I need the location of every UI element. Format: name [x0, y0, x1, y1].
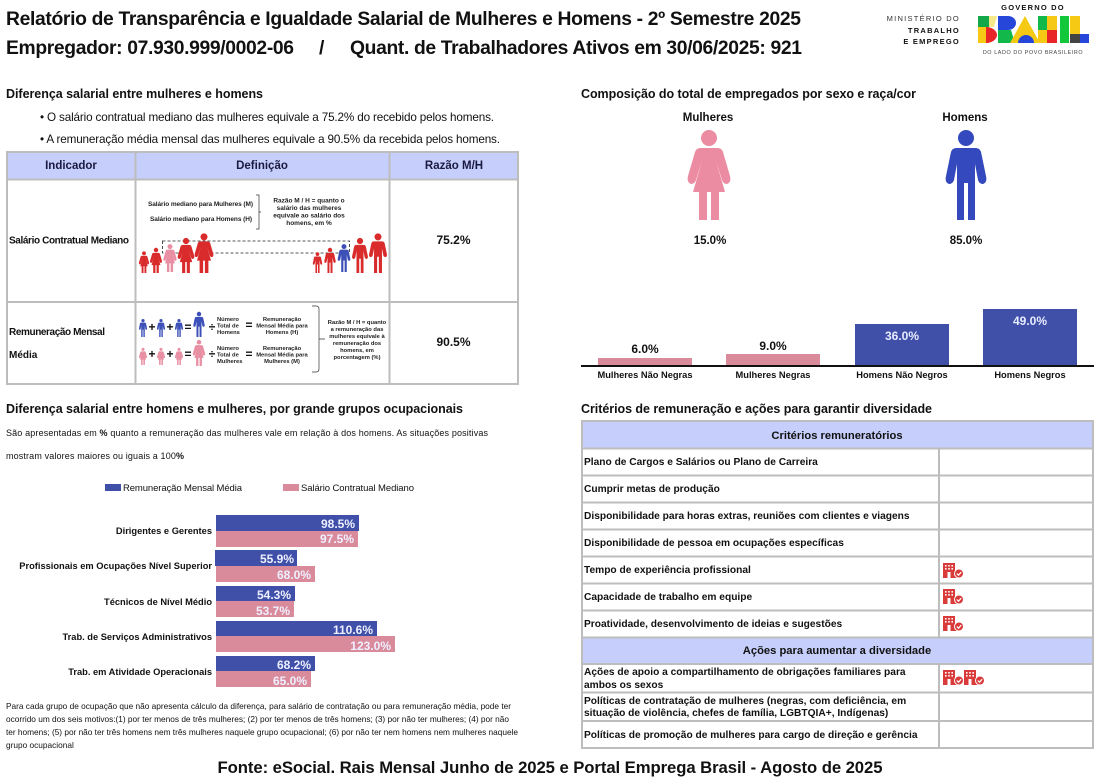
critérios labels: Proatividade, desenvolvimento de ideias e sugestões	[584, 619, 843, 630]
diagram: remuneração média: Razão M / H = quanto	[328, 320, 387, 326]
text block: explicação: São apresentadas em % quanto a remuneração das mulheres vale em relação à dos homens. As situações positivas	[6, 428, 488, 438]
table headers: Razão M/H	[425, 160, 483, 172]
table headers: Definição	[236, 160, 288, 172]
text block: nota de rodapé: grupo ocupacional	[6, 740, 74, 750]
bar chart: composição por sexo e raça	[581, 309, 1094, 380]
critérios labels: Políticas de promoção de mulheres para cargo de direção e gerência	[584, 730, 918, 741]
bar chart: grupos ocupacionais: 68.0%	[277, 568, 311, 582]
bar chart: grupos ocupacionais: Dirigentes e Gerentes	[116, 526, 212, 536]
heading: diferença salarial: Diferença salarial entre mulheres e homens	[6, 87, 263, 101]
row labels: Salário Contratual Mediano	[9, 236, 129, 246]
diagram: remuneração média: =	[184, 347, 192, 361]
critérios labels	[584, 457, 918, 741]
table section headers: Critérios remuneratórios	[771, 430, 903, 442]
diagram: salário mediano	[139, 195, 387, 273]
text block: nota de rodapé	[6, 701, 518, 750]
diagram: remuneração média: =	[184, 320, 192, 334]
panel: tabela de indicadores	[7, 152, 518, 384]
bar chart: grupos ocupacionais: Técnicos de Nível Médio	[104, 597, 212, 607]
critérios labels: ambos os sexos	[584, 680, 664, 691]
bar chart: grupos ocupacionais: 68.2%	[277, 658, 311, 672]
title: Relatório de Transparência e Igualdade Salarial de Mulheres e Homens - 2º Semestre 2025	[6, 9, 801, 30]
bar chart: grupos ocupacionais: 55.9%	[260, 552, 294, 566]
row values	[436, 233, 471, 349]
critérios labels: situação de violência, chefes de família, LGBTQIA+, Indígenas)	[584, 708, 888, 719]
bar chart: grupos ocupacionais: 97.5%	[320, 532, 354, 546]
bar chart: grupos ocupacionais: 54.3%	[257, 588, 291, 602]
diagram: remuneração média: Total de	[217, 352, 240, 358]
bar chart: composição por sexo e raça: Mulheres Negras	[736, 370, 810, 380]
heading: composição: Composição do total de empregados por sexo e raça/cor	[581, 87, 916, 101]
bar chart: composição por sexo e raça: Homens Negros	[994, 370, 1066, 380]
diagram: remuneração média: Número	[217, 346, 239, 352]
diagram: remuneração média: remuneração dos	[333, 341, 381, 347]
icon: empresa com selo	[943, 563, 984, 685]
bar chart: grupos ocupacionais: Trab. em Atividade Operacionais	[68, 667, 212, 677]
title: /	[319, 38, 325, 59]
row values: 75.2%	[436, 233, 471, 247]
text block: bullets: • O salário contratual mediano das mulheres equivale a 75.2% do recebido pelos homens.	[40, 111, 494, 124]
critérios labels: Tempo de experiência profissional	[584, 565, 751, 576]
legend: Salário Contratual Mediano	[301, 483, 414, 494]
table headers: Indicador	[45, 160, 97, 172]
diagram: remuneração média: =	[245, 318, 253, 332]
diagram: remuneração média: Mensal Média para	[256, 324, 309, 330]
row labels	[9, 236, 129, 361]
text block: nota de rodapé: Para cada grupo de ocupação que não apresenta cálculo da diferença, para salário de contratação ou para remuneração média, pode ter	[6, 701, 511, 711]
diagram: remuneração média: +	[166, 347, 174, 361]
pictogram: mulheres: Mulheres	[683, 112, 733, 124]
logo: Governo do Brasil: DO LADO DO POVO BRASILEIRO	[983, 50, 1083, 56]
diagram: salário mediano: equivale ao salário dos	[273, 212, 345, 220]
diagram: remuneração média: Homens (H)	[266, 330, 298, 336]
bar chart: composição por sexo e raça: 9.0%	[759, 339, 787, 353]
row labels: Remuneração Mensal	[9, 327, 105, 338]
diagram: remuneração média: homens, em	[340, 348, 374, 354]
diagram: remuneração média: Número	[217, 317, 239, 323]
bar chart: composição por sexo e raça: 6.0%	[631, 342, 659, 356]
diagram: remuneração média: Remuneração	[263, 317, 302, 323]
diagram: salário mediano: salário das mulheres	[277, 205, 342, 212]
bar chart: grupos ocupacionais: 110.6%	[333, 623, 373, 637]
text block: bullets	[40, 111, 500, 146]
title	[6, 9, 802, 59]
logo: Ministério do Trabalho e Emprego: TRABALHO	[908, 26, 960, 35]
panel: tabela de critérios	[582, 421, 1093, 748]
bar chart: composição por sexo e raça: Mulheres Não Negras	[597, 370, 693, 380]
logo: Governo do Brasil	[978, 3, 1089, 56]
pictogram: mulheres	[683, 112, 733, 247]
logo: Ministério do Trabalho e Emprego	[887, 14, 960, 46]
diagram: remuneração média: porcentagem (%)	[333, 355, 381, 361]
logo: Governo do Brasil: GOVERNO DO	[1001, 3, 1065, 12]
text block: explicação: mostram valores maiores ou iguais a 100%	[6, 451, 184, 461]
pictogram: mulheres: 15.0%	[694, 235, 726, 247]
bar chart: grupos ocupacionais: Profissionais em Ocupações Nível Superior	[19, 561, 212, 571]
legend: Remuneração Mensal Média	[123, 483, 243, 494]
diagram: remuneração média: mulheres equivale à	[329, 334, 385, 340]
text block: bullets: • A remuneração média mensal das mulheres equivale a 90.5% da recebida pelos homens.	[40, 133, 500, 146]
critérios labels: Ações de apoio a compartilhamento de obrigações familiares para	[584, 667, 906, 678]
pictogram: homens: 85.0%	[950, 235, 982, 247]
diagram: remuneração média: Mulheres	[217, 359, 242, 365]
diagram: remuneração média: a remuneração das	[331, 327, 383, 333]
row values: 90.5%	[436, 335, 471, 349]
diagram: remuneração média: Mulheres (M)	[264, 359, 300, 365]
diagram: remuneração média: +	[166, 320, 174, 334]
row labels: Média	[9, 350, 38, 361]
diagram: remuneração média: Total de	[217, 324, 240, 330]
pictogram: homens	[942, 112, 988, 247]
diagram: remuneração média: +	[148, 320, 156, 334]
diagram: remuneração média	[139, 306, 387, 372]
diagram: remuneração média: ÷	[209, 347, 216, 361]
bar chart: composição por sexo e raça: 49.0%	[1013, 314, 1047, 328]
bar chart: grupos ocupacionais	[19, 515, 395, 688]
bar chart: composição por sexo e raça: Homens Não Negros	[856, 370, 948, 380]
title: Empregador: 07.930.999/0002-06	[6, 38, 294, 59]
critérios labels: Disponibilidade para horas extras, reuniões com clientes e viagens	[584, 511, 910, 522]
critérios labels: Cumprir metas de produção	[584, 484, 720, 495]
text block: nota de rodapé: ocorrido um dos seis motivos:(1) por ter menos de três mulheres; (2) por ter menos de três homens; (3) por não ter mulheres; (4) por não	[6, 714, 509, 724]
diagram: remuneração média: Mensal Média para	[256, 352, 309, 358]
table section headers	[743, 430, 931, 657]
table headers	[45, 160, 483, 172]
bar chart: grupos ocupacionais: Trab. de Serviços Administrativos	[62, 632, 212, 642]
diagram: remuneração média: Remuneração	[263, 346, 302, 352]
critérios labels: Disponibilidade de pessoa em ocupações específicas	[584, 538, 844, 549]
bar chart: grupos ocupacionais: 65.0%	[273, 674, 307, 688]
bar chart: composição por sexo e raça: 36.0%	[885, 329, 919, 343]
diagram: remuneração média: =	[245, 347, 253, 361]
diagram: remuneração média: +	[148, 347, 156, 361]
logo: Ministério do Trabalho e Emprego: MINISTÉRIO DO	[887, 14, 960, 23]
text block: nota de rodapé: ter homens; (5) por não ter três homens nem três mulheres naquele grupo ocupacional; (6) por não ter nem homens nem mulheres naquele	[6, 727, 518, 737]
text block: explicação	[6, 428, 488, 461]
diagram: remuneração média: ÷	[209, 320, 216, 334]
diagram: remuneração média: Homens	[217, 330, 240, 336]
bar chart: grupos ocupacionais: 98.5%	[321, 517, 355, 531]
title: Quant. de Trabalhadores Ativos em 30/06/2025: 921	[350, 38, 802, 59]
bar chart: grupos ocupacionais: 123.0%	[350, 639, 391, 653]
critérios labels: Políticas de contratação de mulheres (negras, com deficiência, em	[584, 696, 906, 707]
diagram: salário mediano: Razão M / H = quanto o	[273, 198, 345, 204]
bar chart: grupos ocupacionais: 53.7%	[256, 604, 290, 618]
fonte: Fonte: eSocial. Rais Mensal Junho de 2025 e Portal Emprega Brasil - Agosto de 2025	[218, 758, 882, 777]
logo: Ministério do Trabalho e Emprego: E EMPREGO	[903, 37, 960, 46]
diagram: salário mediano: Salário mediano para Homens (H)	[150, 216, 252, 223]
heading: critérios: Critérios de remuneração e ações para garantir diversidade	[581, 402, 932, 416]
diagram: salário mediano: homens, em %	[286, 220, 332, 227]
critérios labels: Capacidade de trabalho em equipe	[584, 592, 752, 603]
heading: grupos ocupacionais: Diferença salarial entre homens e mulheres, por grande grupos ocupacionais	[6, 402, 463, 416]
critérios labels: Plano de Cargos e Salários ou Plano de Carreira	[584, 457, 818, 468]
pictogram: homens: Homens	[942, 112, 988, 124]
table section headers: Ações para aumentar a diversidade	[743, 645, 931, 657]
diagram: salário mediano: Salário mediano para Mulheres (M)	[148, 201, 253, 208]
legend	[105, 483, 414, 494]
